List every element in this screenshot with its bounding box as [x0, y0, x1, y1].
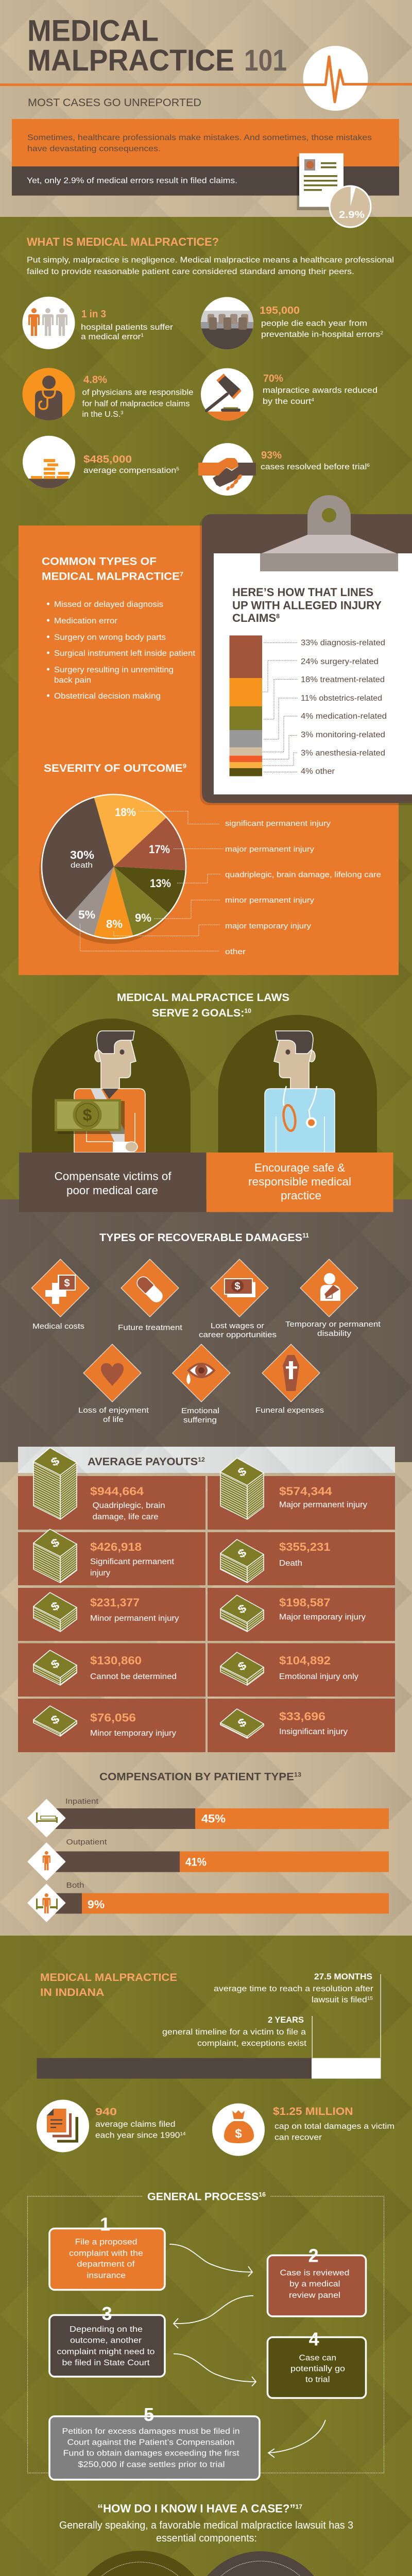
process step 5 — [49, 2404, 260, 2480]
stat: $485,000 — [21, 436, 179, 492]
chart: severity pie: 8% — [106, 918, 123, 930]
heading: alleged injury claims — [232, 586, 382, 624]
icon: medical costs — [31, 1259, 89, 1331]
icon: doctor with stethoscope — [218, 1015, 377, 1153]
chart: stacked bar of claims: 4% other — [301, 767, 335, 776]
text block: payout amounts: $944,664 — [90, 1485, 144, 1498]
panel: clipboard — [200, 495, 412, 805]
process step 2: review panel — [289, 2291, 340, 2300]
stat: 70%: 4 — [311, 397, 314, 402]
stat: $1.25 million cap: $ — [235, 2127, 242, 2141]
text block: common types list: Surgery resulting in unremitting — [54, 666, 174, 674]
process step 1: File a proposed — [75, 2238, 137, 2247]
stat: 70% — [201, 368, 377, 422]
process step 2 — [268, 2245, 366, 2316]
text block: payout amounts: $355,231 — [279, 1540, 331, 1553]
subtitle: MOST CASES GO UNREPORTED — [28, 97, 201, 109]
text block: payout amounts: $76,056 — [90, 1711, 136, 1724]
heading: alleged injury claims: 8 — [276, 613, 280, 620]
stat: 4.8% — [23, 368, 193, 420]
chart: stacked bar of claims: 11% obstetrics-related — [301, 694, 382, 703]
icon: lost wages: Lost wages or — [211, 1321, 264, 1330]
stat: $1.25 million cap — [212, 2104, 394, 2156]
heading: common types — [42, 555, 183, 583]
chart: stacked bar of claims — [230, 635, 387, 776]
icon: claim document with 2.9% pie: 2.9% — [339, 210, 365, 221]
icon: money stacks: $ — [236, 1546, 249, 1561]
panel: encourage safe practice — [207, 1153, 393, 1212]
icon: loss of enjoyment — [78, 1344, 149, 1424]
chart: Indiana timeline: general timeline for a victim to file a — [162, 2028, 306, 2037]
process step 1: complaint with the — [69, 2249, 143, 2258]
panel: orange types and severity — [19, 526, 399, 975]
heading: how do I know I have a case: “HOW DO I KNOW I HAVE A CASE?” — [97, 2502, 294, 2515]
chart: Indiana timeline: average time to reach a resolution after — [214, 1985, 373, 1993]
icon: disability: Temporary or permanent — [285, 1320, 381, 1329]
text block: three components intro: Generally speaking, a favorable medical malpractice lawsuit has 3 — [59, 2520, 353, 2531]
stat: $1.25 million cap: cap on total damages a victim — [274, 2122, 394, 2131]
stat: 70%: 70% — [263, 373, 283, 384]
heading: what is medical malpractice: WHAT IS MEDICAL MALPRACTICE? — [27, 235, 219, 248]
arrows: process flow — [169, 2244, 325, 2458]
chart: stacked bar of claims: 4% medication-related — [301, 712, 387, 721]
stat: 195,000: 2 — [380, 330, 383, 335]
heading: two goals — [117, 992, 289, 1019]
process step 1 — [49, 2214, 165, 2290]
icon: money stacks: $ — [236, 1602, 249, 1617]
chart: severity pie: 18% — [115, 806, 136, 819]
heading: two goals: SERVE 2 GOALS: — [152, 1007, 243, 1019]
heading: common types: 7 — [180, 571, 183, 578]
icon: money stacks: $ — [49, 1713, 62, 1727]
heading: alleged injury claims: CLAIMS — [232, 612, 276, 624]
panel: intro: have devastating consequences. — [27, 144, 161, 154]
stat: 1 in 3: 1 — [141, 333, 144, 338]
chart: outpatient bar — [28, 1838, 389, 1880]
heading: malpractice in Indiana — [40, 1972, 177, 1998]
chart: severity pie: 9% — [135, 911, 151, 924]
heading: severity of outcome: SEVERITY OF OUTCOME — [44, 762, 174, 774]
chart: stacked bar of claims: 18% treatment-related — [301, 675, 385, 684]
stat: $1.25 million cap: $1.25 MILLION — [273, 2106, 353, 2117]
chart: severity pie: 5% — [78, 908, 95, 921]
icon: money stacks: $ — [49, 1536, 62, 1551]
process step 5: Petition for excess damages must be filed in — [62, 2427, 239, 2436]
panel: average payouts header — [18, 1447, 395, 1473]
text block: common types list — [47, 600, 196, 701]
stat: 940 claims — [37, 2100, 185, 2153]
panel: encourage safe practice: practice — [281, 1189, 321, 1202]
icon: lost wages: $ — [234, 1281, 241, 1292]
panel: average payouts header: AVERAGE PAYOUTS — [88, 1456, 194, 1468]
title: MEDICAL — [27, 14, 159, 47]
text block: definition: failed to provide reasonable patient care considered standard among their peers. — [27, 267, 354, 276]
process step 2: by a medical — [289, 2280, 340, 2289]
icon: money stacks: $ — [236, 1716, 249, 1731]
stat: 940 claims: each year since 1990 — [95, 2131, 171, 2140]
stat: $485,000: 5 — [176, 466, 179, 471]
chart: Indiana timeline: complaint, exceptions exist — [197, 2039, 307, 2048]
icon: disability — [285, 1259, 381, 1338]
process step 5: Fund to obtain damages exceeding the first — [63, 2449, 239, 2458]
process step 3: be filed in State Court — [62, 2359, 150, 2367]
heading: recoverable damages: 11 — [302, 1232, 309, 1239]
process step 5: $250,000 if case settles prior to trial — [78, 2461, 225, 2469]
stat: 1 in 3: hospital patients suffer — [81, 323, 173, 332]
process step 5: Court against the Patient’s Compensation — [67, 2438, 235, 2447]
stat: 93% — [198, 443, 370, 496]
chart: stacked bar of claims: 24% surgery-related — [301, 657, 379, 666]
text block: three components intro — [59, 2520, 353, 2544]
panel: compensate victims: Compensate victims of — [55, 1170, 171, 1183]
stat: 93%: cases resolved before trial — [261, 463, 354, 471]
icon: money stacks: $ — [236, 1465, 249, 1480]
chart: stacked bar of claims: 3% monitoring-related — [301, 731, 385, 739]
panel: average payouts header: 12 — [198, 1456, 205, 1463]
icon: patient with money: $ — [83, 1106, 92, 1124]
text block: definition — [27, 256, 394, 276]
panel: encourage safe practice: Encourage safe & — [254, 1161, 345, 1174]
process step 1: insurance — [87, 2271, 126, 2280]
title: 101 — [244, 44, 287, 77]
text block: payout labels: Emotional injury only — [279, 1672, 358, 1681]
process step 3: Depending on the — [70, 2325, 143, 2334]
icon: heartbeat line — [0, 46, 412, 111]
process step 4 — [268, 2329, 366, 2398]
text block: common types list: back pain — [54, 676, 91, 685]
icon: medical costs: $ — [64, 1278, 70, 1289]
chart: stacked bar of claims: 3% anesthesia-related — [301, 749, 385, 758]
panel: compensate victims: poor medical care — [66, 1184, 158, 1197]
text block: payout labels: Minor permanent injury — [90, 1614, 179, 1623]
panel: general process frame — [28, 2191, 384, 2473]
heading: compensation by patient type: 13 — [294, 1771, 301, 1778]
chart: Indiana timeline — [37, 1972, 381, 2079]
heading: malpractice in Indiana: IN INDIANA — [40, 1987, 104, 1998]
icon: lost wages: career opportunities — [199, 1331, 277, 1340]
stat: 1 in 3: 1 in 3 — [81, 309, 106, 320]
stat: 940 claims: average claims filed — [95, 2120, 176, 2129]
text block: common types list: Surgical instrument left inside patient — [54, 649, 196, 658]
text block: payout amounts: $130,860 — [90, 1654, 142, 1667]
process step 3: complaint might need to — [57, 2348, 154, 2357]
icon: funeral expenses: Funeral expenses — [255, 1406, 324, 1415]
stat: $1.25 million cap: can recover — [274, 2133, 322, 2142]
stat: 70%: malpractice awards reduced — [263, 386, 377, 395]
stat: 195,000: preventable in-hospital errors — [261, 330, 365, 339]
text block: three components intro: essential components: — [156, 2533, 257, 2544]
icon: claim document with 2.9% pie — [297, 154, 371, 227]
heading: compensation by patient type: COMPENSATION BY PATIENT TYPE — [99, 1771, 284, 1783]
icon: emotional suffering: Emotional — [181, 1406, 219, 1415]
icon: money stacks: $ — [49, 1454, 62, 1469]
stat: 195,000 — [201, 297, 383, 350]
panel: payout cells — [18, 1476, 395, 1752]
process step 3: outcome, another — [70, 2336, 142, 2345]
process step 4: 4 — [309, 2329, 319, 2350]
heading: recoverable damages: TYPES OF RECOVERABLE DAMAGES — [99, 1232, 297, 1244]
text block: payout labels: Minor temporary injury — [90, 1729, 176, 1738]
chart: outpatient bar: Outpatient — [66, 1838, 107, 1846]
text block: payout labels: injury — [90, 1569, 110, 1578]
icon: money stacks: $ — [49, 1599, 62, 1614]
process step 4: potentially go — [290, 2364, 345, 2373]
heading: common types: COMMON TYPES OF — [42, 555, 157, 568]
text block: payout amounts: $33,696 — [279, 1710, 325, 1723]
stat: 4.8%: in the U.S. — [82, 410, 119, 419]
stat: $485,000: $485,000 — [83, 454, 132, 465]
stat: 93%: 93% — [261, 450, 282, 461]
process step 5: 5 — [144, 2404, 154, 2425]
diagram: component 1 circle — [68, 2551, 211, 2576]
stat: 1 in 3 — [23, 297, 173, 349]
text block: common types list: Surgery on wrong body parts — [54, 633, 166, 642]
chart: severity pie: other — [225, 947, 246, 956]
panel: general process frame: 16 — [259, 2191, 266, 2198]
stat: 93%: 6 — [367, 463, 370, 468]
stat: 4.8%: 3 — [121, 410, 124, 415]
chart: inpatient bar: 45% — [201, 1812, 226, 1825]
text block: payout labels: Quadriplegic, brain — [93, 1501, 165, 1510]
heading: severity of outcome: 9 — [183, 762, 186, 770]
text block: payout labels: Cannot be determined — [90, 1672, 177, 1681]
chart: Indiana timeline: 27.5 MONTHS — [314, 1972, 372, 1981]
text block: payout amounts: $104,892 — [279, 1654, 331, 1667]
stat: 4.8%: of physicians are responsible — [82, 388, 194, 397]
text block: common types list: Obstetrical decision making — [54, 692, 161, 701]
text block: payout amounts: $426,918 — [90, 1540, 142, 1553]
heading: alleged injury claims: HERE’S HOW THAT LINES — [232, 586, 373, 599]
text block: payout amounts: $574,344 — [279, 1485, 332, 1498]
title: MALPRACTICE — [27, 44, 234, 77]
heading: malpractice in Indiana: MEDICAL MALPRACTICE — [40, 1972, 177, 1984]
stat: 4.8%: for half of malpractice claims — [82, 400, 190, 409]
text block: common types list: Medication error — [54, 617, 117, 625]
heading: two goals: MEDICAL MALPRACTICE LAWS — [117, 992, 289, 1004]
process step 3: 3 — [102, 2303, 112, 2324]
icon: emotional suffering: suffering — [183, 1416, 217, 1425]
process step 1: 1 — [100, 2214, 110, 2235]
chart: severity pie: 17% — [149, 843, 170, 856]
chart: inpatient bar — [28, 1797, 389, 1837]
text block: payout labels: Insignificant injury — [279, 1727, 348, 1736]
icon: funeral expenses — [255, 1344, 324, 1415]
process step 1: department of — [77, 2260, 135, 2269]
stat: 940 claims: 14 — [180, 2131, 185, 2136]
chart: severity pie: major permanent injury — [225, 845, 315, 854]
icon: lost wages — [199, 1259, 277, 1340]
stat: 1 in 3: a medical error — [81, 333, 134, 341]
process step 3 — [49, 2303, 165, 2377]
heading: common types: MEDICAL MALPRACTICE — [42, 571, 173, 583]
chart: severity pie: significant permanent injury — [225, 819, 331, 828]
panel: intro: Sometimes, healthcare professionals make mistakes. And sometimes, those mistakes — [27, 133, 372, 142]
chart: severity pie: minor permanent injury — [225, 896, 315, 905]
icon: disability: disability — [317, 1329, 352, 1338]
text block: payout labels: Major permanent injury — [279, 1500, 367, 1510]
icon: money stacks — [33, 1448, 264, 1738]
process step 4: to trial — [305, 2376, 330, 2384]
heading: how do I know I have a case: 17 — [296, 2503, 302, 2510]
process step 2: 2 — [308, 2245, 319, 2266]
text block: payout amounts: $231,377 — [90, 1596, 140, 1609]
stat: 4.8%: 4.8% — [83, 375, 107, 386]
chart: severity pie: major temporary injury — [225, 922, 312, 930]
icon: future treatment: Future treatment — [118, 1323, 183, 1332]
icon: money stacks: $ — [49, 1657, 62, 1672]
chart: both bar: 9% — [88, 1898, 105, 1911]
panel: encourage safe practice: responsible medical — [248, 1175, 351, 1188]
text block: payout amounts — [90, 1485, 332, 1724]
process step 2: Case is reviewed — [280, 2269, 349, 2277]
chart: Indiana timeline: lawsuit is filed — [312, 1996, 361, 2004]
chart: Indiana timeline: 15 — [367, 1996, 373, 2001]
text block: payout amounts: $198,587 — [279, 1596, 331, 1609]
icon: emotional suffering — [173, 1344, 230, 1425]
title — [27, 14, 287, 77]
text block: payout labels: damage, life care — [93, 1513, 159, 1521]
chart: severity pie — [39, 794, 381, 956]
panel: general process frame: GENERAL PROCESS — [147, 2191, 256, 2202]
chart: severity pie: quadriplegic, brain damage, lifelong care — [225, 871, 381, 879]
heading: two goals: 10 — [244, 1007, 251, 1014]
text block: payout labels — [90, 1500, 367, 1738]
stat: 70%: by the court — [263, 397, 304, 406]
icon: patient with money — [32, 1019, 191, 1153]
chart: both bar — [28, 1881, 389, 1922]
text block: definition: Put simply, malpractice is negligence. Medical malpractice means a healthcare professional — [27, 256, 394, 265]
panel: intro — [12, 119, 399, 196]
process step 4: Case can — [299, 2353, 336, 2362]
chart: severity pie: 30% — [70, 849, 94, 861]
icon: loss of enjoyment: Loss of enjoyment — [78, 1406, 149, 1415]
icon: loss of enjoyment: of life — [103, 1415, 124, 1424]
chart: stacked bar of claims: 33% diagnosis-related — [301, 639, 385, 648]
diagram: component 2 circle — [188, 2551, 331, 2576]
text block: payout labels: Major temporary injury — [279, 1613, 366, 1622]
stat: 195,000: people die each year from — [261, 319, 367, 328]
stat: $485,000: average compensation — [83, 466, 164, 475]
text block: payout labels: Significant permanent — [90, 1557, 175, 1566]
chart: outpatient bar: 41% — [185, 1856, 207, 1868]
panel: intro: Yet, only 2.9% of medical errors result in filed claims. — [27, 177, 237, 185]
chart: inpatient bar: Inpatient — [65, 1797, 99, 1806]
text block: payout labels: Death — [279, 1559, 302, 1568]
icon: money stacks: $ — [236, 1659, 249, 1674]
icon: future treatment — [118, 1259, 183, 1332]
text block: common types list: Missed or delayed diagnosis — [54, 600, 163, 609]
icon: medical costs: Medical costs — [32, 1322, 84, 1331]
heading: alleged injury claims: UP WITH ALLEGED INJURY — [232, 599, 382, 612]
stat: 195,000: 195,000 — [260, 305, 300, 316]
chart: both bar: Both — [66, 1881, 84, 1890]
chart: Indiana timeline: 2 YEARS — [268, 2015, 304, 2025]
chart: severity pie: death — [71, 861, 93, 870]
chart: severity pie: 13% — [150, 877, 171, 890]
stat: 940 claims: 940 — [95, 2106, 117, 2117]
panel: compensate victims — [19, 1153, 206, 1212]
